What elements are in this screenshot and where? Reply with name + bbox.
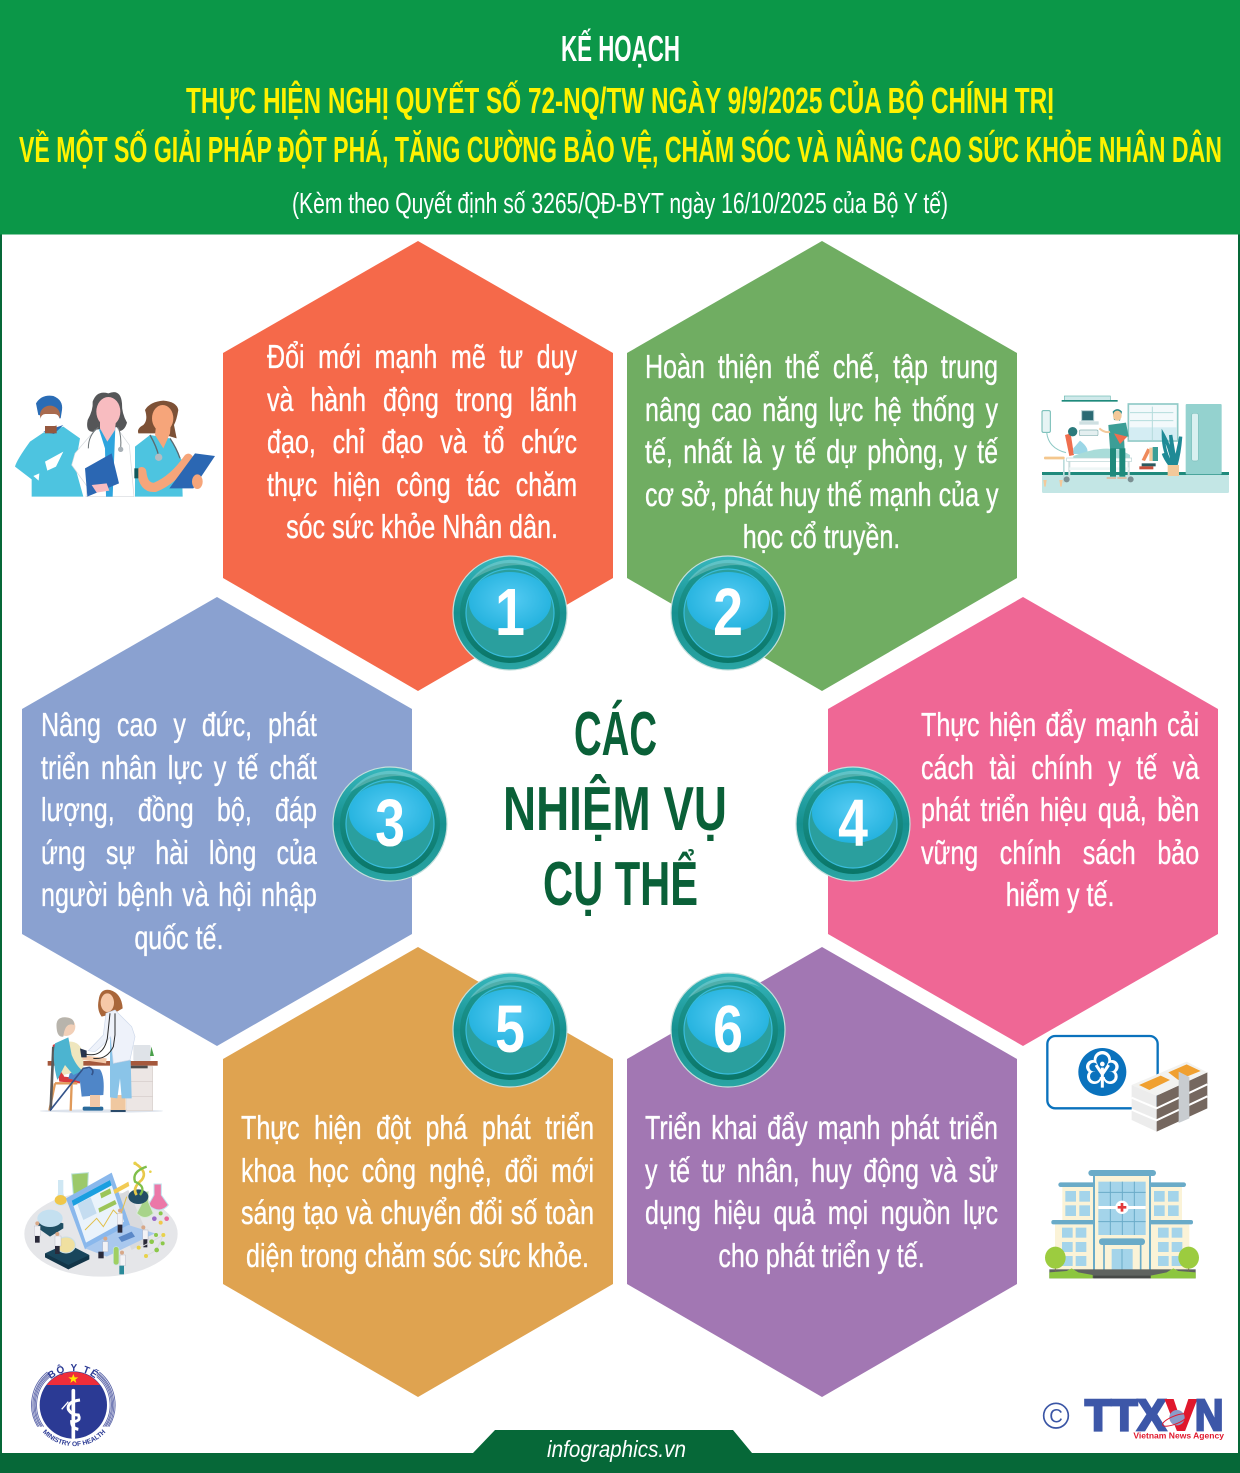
panel 2 text: [645, 348, 999, 556]
patient: [49, 1017, 107, 1111]
panel 3 text: [41, 706, 317, 956]
plant: [1163, 435, 1181, 465]
central heading: [503, 700, 727, 919]
badge 1: 1: [495, 574, 525, 649]
agency wordmark: Vietnam News Agency: [1133, 1431, 1224, 1441]
panel 6: purple hexagon: [627, 947, 1017, 1397]
panel 3 text: Nâng cao y đức, phát: [41, 706, 317, 743]
icon: health insurance card and money: [1046, 1034, 1208, 1132]
badge 5: [452, 972, 568, 1088]
badge 6: [670, 972, 786, 1088]
panel 1 text: sóc sức khỏe Nhân dân.: [286, 508, 558, 545]
books: [1142, 448, 1151, 461]
agency wordmark: V: [1166, 1391, 1196, 1440]
panel 2 text: nâng cao năng lực hệ thống y: [645, 390, 998, 428]
central heading: CÁC: [574, 700, 657, 769]
window: [1128, 404, 1178, 441]
panel 1 text: [266, 338, 578, 545]
logo: Ministry of Health: [31, 1364, 116, 1446]
panel 6 text: dụng hiệu quả mọi nguồn lực: [645, 1194, 998, 1231]
title line: plan: KẾ HOẠCH: [561, 28, 680, 69]
monitor: [1082, 411, 1094, 421]
panel 3 text: lượng, đồng bộ, đáp: [41, 791, 317, 828]
IV and side table: [1042, 411, 1050, 432]
panel 4: pink hexagon: [828, 597, 1218, 1046]
footer site name: infographics.vn: [547, 1436, 686, 1462]
panel 3: blue hexagon: [22, 597, 412, 1046]
copyright mark: [1044, 1403, 1068, 1428]
panel 2 text: Hoàn thiện thể chế, tập trung: [645, 348, 998, 385]
copyright mark: C: [1049, 1406, 1063, 1427]
money stacks: [1132, 1062, 1207, 1132]
panel 5 text: [241, 1109, 594, 1274]
panel 2 text: cơ sở, phát huy thế mạnh của y: [645, 476, 999, 512]
logo: Ministry of Health: MINISTRY OF HEALTH: [42, 1429, 106, 1446]
panel 5 text: sáng tạo và chuyển đổi số toàn: [241, 1194, 594, 1231]
agency wordmark: N: [1195, 1391, 1223, 1440]
panel 1 text: Đổi mới mạnh mẽ tư duy: [267, 338, 577, 375]
icon: medical staff: [15, 392, 215, 497]
panel 1: orange hexagon: [223, 241, 613, 691]
panel 3 text: quốc tế.: [134, 918, 224, 956]
panel 3 text: ứng sự hài lòng của: [41, 834, 317, 870]
beaker and flasks: [72, 1173, 88, 1194]
nurse: [134, 401, 215, 497]
scientists: [34, 1213, 148, 1266]
icon: hospital ward: [1042, 396, 1229, 493]
panel 4 text: cách tài chính y tế và: [921, 748, 1199, 786]
doctor: [85, 990, 135, 1112]
panel 6 text: Triển khai đẩy mạnh phát triển: [645, 1109, 998, 1146]
badge 6: 6: [713, 991, 743, 1066]
badge 1: [452, 555, 568, 671]
nurse: [1113, 409, 1122, 421]
panel 1 text: đạo, chỉ đạo và tổ chức: [267, 423, 577, 460]
doctor: [72, 392, 134, 497]
logo: Ministry of Health: BỘ Y TẾ: [47, 1364, 100, 1379]
badge 3: [332, 766, 448, 882]
laptop: [66, 1173, 130, 1249]
panel 5 text: Thực hiện đột phá phát triển: [241, 1109, 594, 1146]
panel 6 text: y tế tư nhân, huy động và sử: [645, 1152, 998, 1188]
panel 4 text: phát triển hiệu quả, bền: [921, 791, 1199, 828]
scales: [45, 1243, 89, 1269]
footer bar: [2, 1430, 1238, 1473]
surgeon: [15, 396, 83, 497]
panel 5 text: khoa học công nghệ, đổi mới: [241, 1152, 594, 1188]
panel 4 text: vững chính sách bảo: [921, 834, 1199, 870]
panel 1 text: và hành động trong lãnh: [267, 380, 577, 418]
molecules: [138, 1235, 163, 1256]
badge 4: [795, 766, 911, 882]
door: [1186, 404, 1222, 474]
badge 3: 3: [375, 785, 405, 860]
badge 2: 2: [713, 574, 743, 649]
icon: doctor measuring blood pressure: [40, 990, 163, 1112]
panel 3 text: triển nhân lực y tế chất: [41, 748, 317, 786]
panel 1 text: thực hiện công tác chăm: [267, 466, 577, 502]
panel 5 text: diện trong chăm sóc sức khỏe.: [246, 1236, 589, 1274]
panel 4 text: hiểm y tế.: [1006, 876, 1114, 913]
panel 2 text: tế, nhất là y tế dự phòng, y tế: [645, 433, 998, 470]
panel 6 text: [644, 1109, 998, 1274]
icon: hospital building: [1045, 1170, 1199, 1278]
header banner: [0, 0, 1240, 234]
badge 2: [670, 555, 786, 671]
panel 4 text: [920, 706, 1200, 914]
subtitle: (Kèm theo Quyết định số 3265/QĐ-BYT ngày 16/10/2025 của Bộ Y tế): [292, 188, 948, 220]
panel 6 text: cho phát triển y tế.: [718, 1236, 925, 1274]
dna: [135, 1163, 144, 1195]
panel 4 text: Thực hiện đẩy mạnh cải: [921, 706, 1199, 743]
agency wordmark: TTX: [1085, 1391, 1166, 1440]
badge 4: 4: [838, 785, 868, 860]
agency wordmark: [1085, 1391, 1224, 1441]
logo: TTXVN: [1042, 1391, 1224, 1441]
bed and patient: [1065, 433, 1074, 456]
panel 5: amber hexagon: [223, 947, 613, 1397]
panel 3 text: người bệnh và hội nhập: [41, 876, 317, 913]
panel 2: green hexagon: [627, 241, 1017, 691]
icon: digital science lab: [24, 1162, 178, 1276]
badge 5: 5: [495, 991, 525, 1066]
panel 2 text: học cổ truyền.: [743, 518, 900, 555]
